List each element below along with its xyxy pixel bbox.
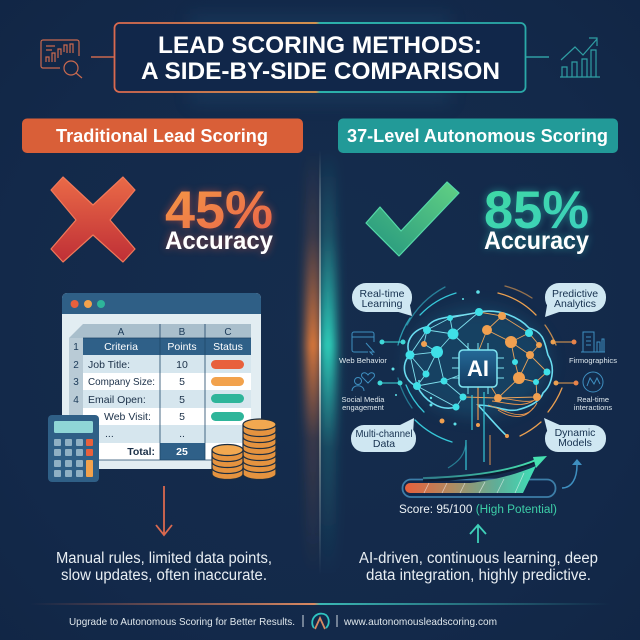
stat: 45% accuracy: 45% [165,181,273,240]
stat: 85% accuracy: Accuracy [484,227,589,255]
AI chip [452,343,504,394]
stat: 45% accuracy: Accuracy [165,227,273,255]
icon: real-time interactions: Real-time [577,395,609,404]
callout: dynamic models: Dynamic [555,427,595,439]
center divider [306,150,336,575]
table text: 5 [179,376,185,388]
table text: ... [105,428,114,440]
brain outline [404,311,552,436]
callout: predictive analytics [545,283,606,317]
text: autonomous summary: data integration, highly predictive. [366,567,591,584]
icon: web behavior [339,332,406,365]
table text [88,341,243,458]
text: autonomous summary [359,550,598,584]
callout: real-time learning [352,283,412,316]
gauge fill [405,466,536,493]
icon: real-time interactions: interactions [574,403,612,412]
column headers: B [179,327,186,338]
icon: coin stacks [212,419,276,480]
arrow: down [156,486,172,535]
icon: report with magnifier [41,40,114,78]
heading pill: autonomous [338,118,618,153]
text: traditional summary: slow updates, often inaccurate. [61,567,267,584]
table text: 5 [179,394,185,406]
table text: Company Size: [88,376,155,388]
title text: LEAD SCORING METHODS: [158,32,482,59]
title text: A SIDE-BY-SIDE COMPARISON [141,58,500,85]
column headers: 3 [73,377,79,388]
stat: 45% accuracy: Accuracy [165,227,273,255]
footer: Upgrade to Autonomous Scoring for Better Results. [69,616,295,628]
score label: Score: 95/100 (High Potential) [399,504,557,516]
table text: Job Title: [88,359,130,371]
AI chip: AI [467,356,489,381]
footer logo [312,614,329,629]
arrow: up [470,525,486,543]
table rows [83,324,251,460]
callout: predictive analytics: Analytics [554,298,596,310]
AI brain diagram [392,286,562,470]
table text: Status [213,341,243,353]
icon: web behavior: Web Behavior [339,356,387,365]
icon: real-time interactions [554,372,612,412]
footer: www.autonomousleadscoring.com [343,616,497,628]
table text: 25 [176,446,188,458]
table text: Points [167,341,197,353]
footer [30,603,610,629]
icon: red cross [51,177,135,262]
callout: multi-channel data: Data [373,438,395,450]
table text: Email Open: [88,394,146,406]
heading pill: autonomous: 37-Level Autonomous Scoring [347,126,608,146]
title text [141,32,500,85]
icon: firmographics: Firmographics [569,356,617,365]
column headers [69,324,251,460]
icon: social media engagement: Social Media [342,395,385,404]
score gauge [399,456,582,516]
stat: 45% accuracy: 45% [165,181,273,240]
column headers: 4 [73,395,79,406]
table text: .. [179,428,185,440]
status pills [211,360,244,421]
table text: Web Visit: [104,411,151,423]
text: traditional summary: Manual rules, limited data points, [56,550,272,567]
callout: real-time learning: Real-time [360,288,405,300]
stat: 85% accuracy: 85% [484,181,589,240]
swoosh arrow [423,462,536,480]
heading pill: traditional: Traditional Lead Scoring [56,126,268,146]
callout: predictive analytics: Predictive [552,288,598,300]
callout: dynamic models: Models [558,437,592,449]
icon: calculator [48,415,99,482]
orange nodes [421,312,542,438]
small particles [392,290,480,426]
column headers: 1 [73,342,79,353]
heading pill: traditional [22,118,303,153]
neural links [410,312,479,407]
column headers: C [224,327,232,338]
table text: 5 [179,411,185,423]
table text: 10 [176,359,188,371]
column headers: 2 [73,360,79,371]
icon: social media engagement: engagement [342,403,385,412]
icon: social media engagement [342,373,402,412]
text: autonomous summary: AI-driven, continuous learning, deep [359,550,598,567]
callout: dynamic models [544,418,606,452]
table text: Criteria [104,341,138,353]
callout: multi-channel data [351,418,416,452]
text: traditional summary [56,550,272,584]
callout: real-time learning: Learning [362,298,403,310]
spreadsheet window [62,293,261,469]
circuit stems [448,387,490,470]
table text: Total: [127,446,155,458]
stat: 85% accuracy: 85% [484,181,589,240]
icon: green check [366,182,459,256]
orbit arcs [398,286,562,442]
icon: firmographics [550,332,617,365]
small arrow [562,465,577,488]
column headers: A [118,327,125,338]
cerebellum lines [488,396,540,416]
icon: growth chart [526,38,600,77]
title box [114,14,526,104]
callout: multi-channel data: Multi-channel [356,428,412,440]
teal nodes [406,308,550,410]
gauge stripes [424,473,524,493]
stat: 85% accuracy: Accuracy [484,227,589,255]
